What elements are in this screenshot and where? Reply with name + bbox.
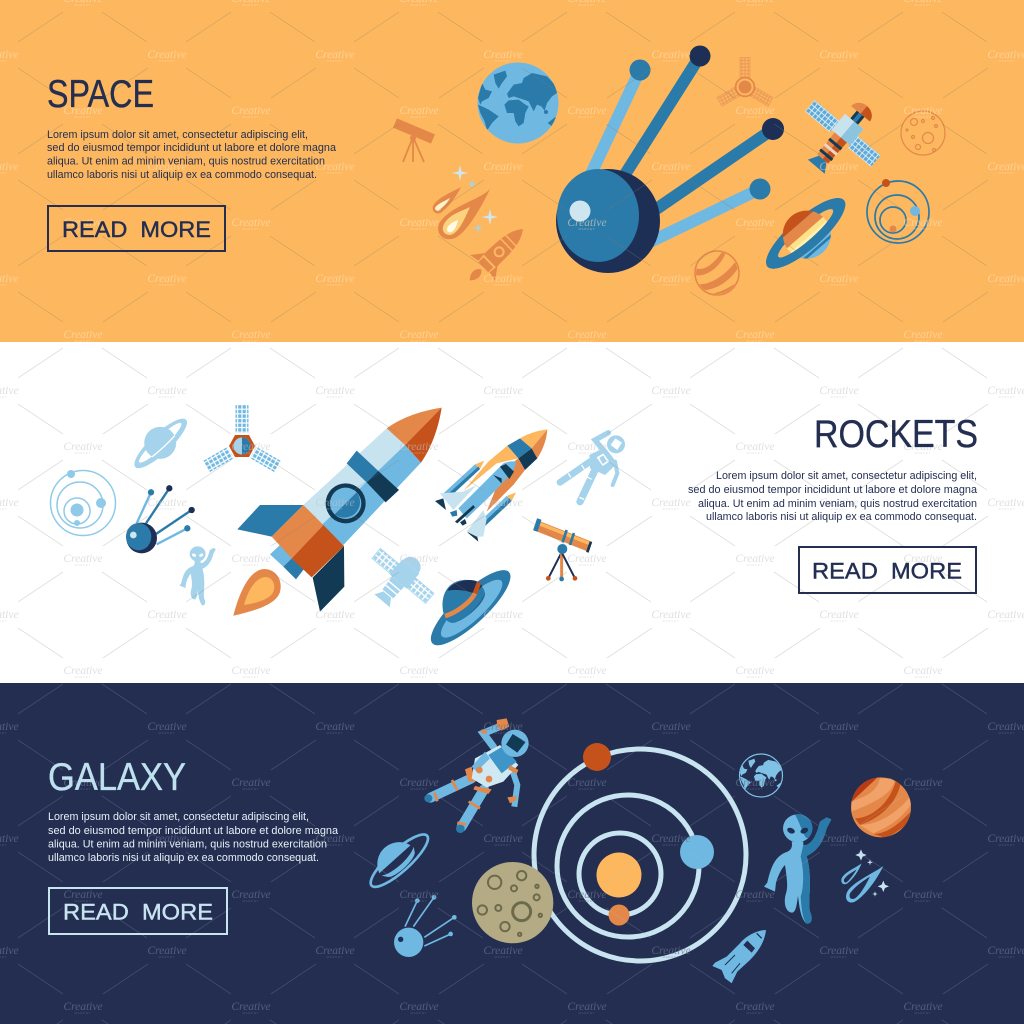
panel: space banner background <box>0 0 1024 342</box>
watermark overlay: space band <box>0 0 1024 342</box>
button: rockets read more: READ MORE <box>812 558 962 584</box>
icon: space shuttle <box>435 429 547 542</box>
panel: galaxy banner background <box>0 683 1024 1024</box>
icon: galaxy sputnik <box>394 895 457 957</box>
heading: SPACE: SPACE <box>47 73 154 116</box>
icon: telescope <box>535 519 591 581</box>
icon: galaxy ringed planet <box>359 821 434 894</box>
text block: space body: ullamco laboris nisi ut aliquip ex ea commodo consequat. <box>47 169 317 181</box>
text block: galaxy body: ullamco laboris nisi ut aliquip ex ea commodo consequat. <box>48 852 319 864</box>
text block: galaxy body: sed do eiusmod tempor incididunt ut labore et dolore magna <box>48 825 339 837</box>
text block: galaxy body <box>48 811 339 864</box>
icon: white band alien <box>179 546 216 605</box>
watermark overlay: rockets band <box>0 342 1024 683</box>
heading: GALAXY: GALAXY <box>48 756 186 799</box>
icon: ringed planet on orange <box>766 198 846 269</box>
icon: white band solar system <box>50 470 116 536</box>
button: space read more <box>48 206 225 251</box>
button: galaxy read more <box>49 888 227 934</box>
text block: rockets body: sed do eiusmod tempor incididunt ut labore et dolore magna <box>688 484 978 496</box>
icon: flying saucer <box>421 560 520 655</box>
icon: small solar system on orange <box>867 179 929 243</box>
icon: white band astronaut <box>560 433 625 502</box>
panel: rockets banner background <box>0 342 1024 683</box>
text block: rockets body: aliqua. Ut enim ad minim veniam, quis nostrud exercitation <box>698 498 977 510</box>
icon: galaxy small shuttle <box>712 930 766 983</box>
text block: rockets body: ullamco laboris nisi ut aliquip ex ea commodo consequat. <box>706 511 977 523</box>
text block: space body: Lorem ipsum dolor sit amet, consectetur adipiscing elit, <box>47 129 308 141</box>
icon: large rocket <box>237 408 442 612</box>
icon: orange telescope <box>395 123 433 162</box>
button: galaxy read more: READ MORE <box>63 900 213 924</box>
icon: comets and stars on orange <box>433 165 498 239</box>
text block: space body <box>47 129 337 181</box>
text block: galaxy body: aliqua. Ut enim ad minim veniam, quis nostrud exercitation <box>48 838 327 850</box>
text block: space body: aliqua. Ut enim ad minim veniam, quis nostrud exercitation <box>47 156 325 168</box>
icon: outlined earth <box>740 754 782 797</box>
icon: white band three-panel satellite <box>203 405 281 472</box>
button: rockets read more <box>799 547 976 593</box>
icon: white band pale satellite <box>355 537 444 623</box>
icon: galaxy comets and stars <box>841 849 889 903</box>
text block: rockets body <box>688 470 978 523</box>
icon: colored satellite <box>783 78 899 194</box>
icon: white band ringed planet <box>124 407 196 478</box>
icon: white band sputnik <box>126 485 195 553</box>
icon: galaxy alien <box>764 814 831 924</box>
icon: large sputnik <box>556 46 784 273</box>
icon: banded red planet <box>850 777 912 838</box>
text block: space body: sed do eiusmod tempor incididunt ut labore et dolore magna <box>47 142 337 154</box>
icon: large rocket flame <box>233 569 281 616</box>
icon: galaxy astronaut <box>424 718 529 833</box>
watermark overlay: galaxy band <box>0 683 1024 1024</box>
text block: galaxy body: Lorem ipsum dolor sit amet, consectetur adipiscing elit, <box>48 811 309 823</box>
icon: orange three-panel satellite <box>717 57 773 106</box>
icon: galaxy solar system <box>534 743 746 961</box>
icon: cratered moon <box>472 862 553 943</box>
icon: striped planet on orange <box>695 251 740 298</box>
button: space read more: READ MORE <box>62 217 211 242</box>
icon: orange moon outline <box>901 111 945 155</box>
icon: earth globe <box>478 62 558 144</box>
icon: orange small rocket <box>457 216 535 293</box>
heading: ROCKETS: ROCKETS <box>814 413 978 456</box>
text block: rockets body: Lorem ipsum dolor sit amet, consectetur adipiscing elit, <box>716 470 977 482</box>
